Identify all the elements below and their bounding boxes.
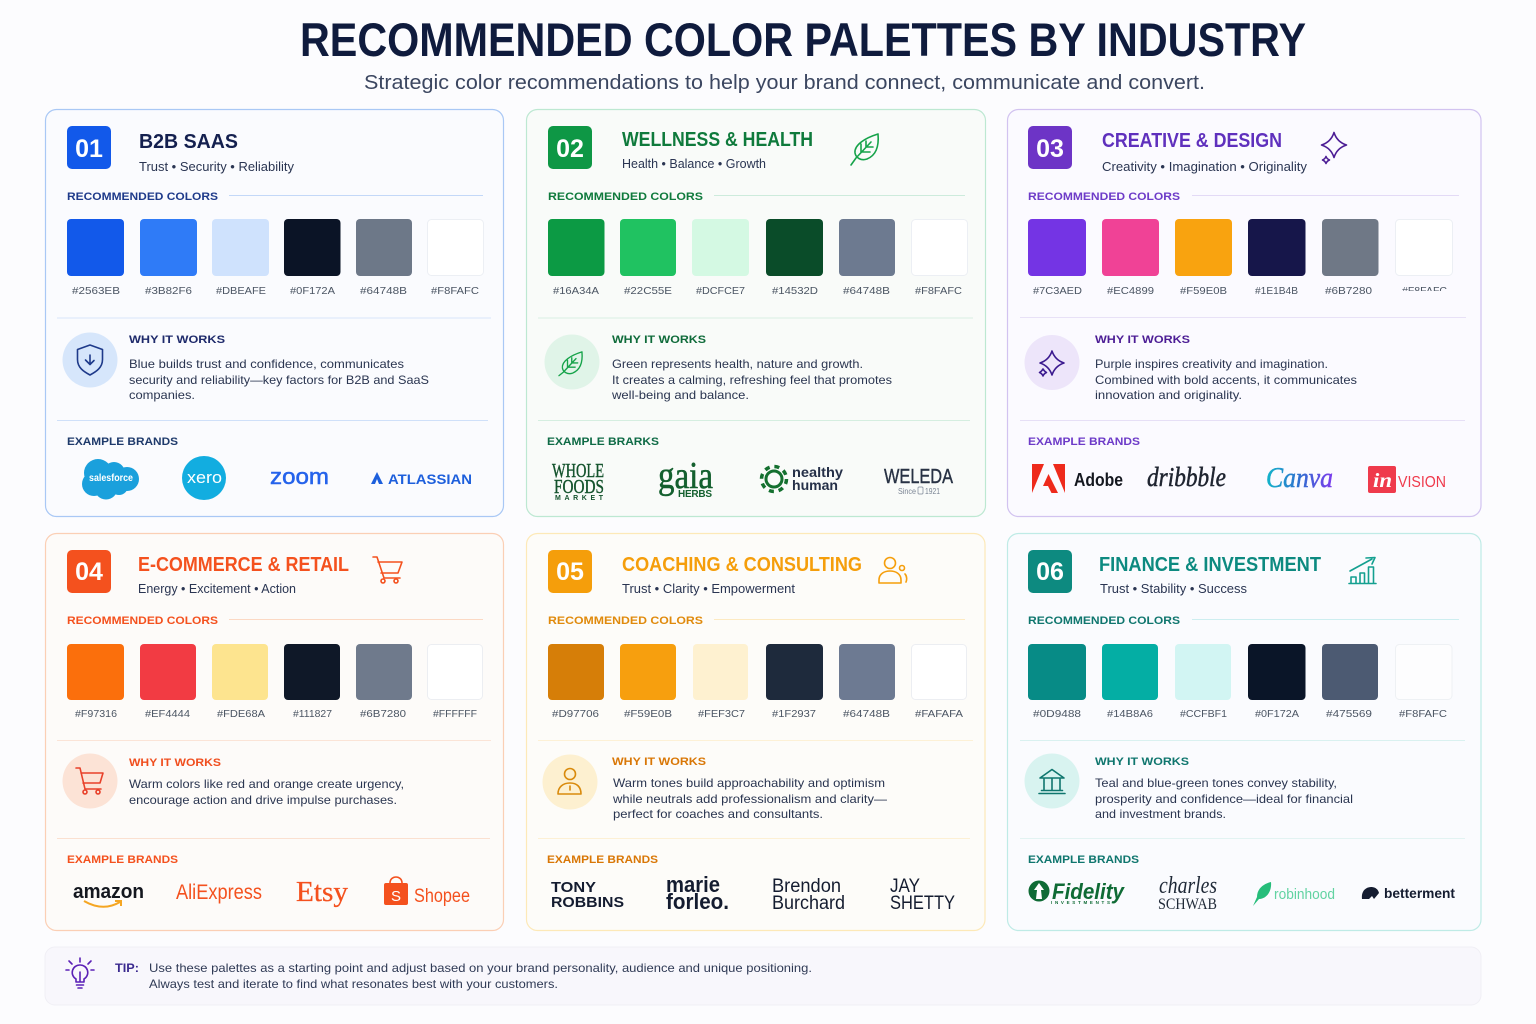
swatch #6B7280: #6B7280 [360, 708, 406, 720]
swatch #DBEAFE [212, 219, 269, 297]
subtitle: Strategic color recommendations to help your brand connect, communicate and convert. [364, 72, 1205, 94]
badge 01 [67, 126, 111, 169]
logo: tony robbins: ROBBINS [551, 894, 624, 911]
swatch #F97316: #F97316 [75, 708, 117, 720]
icon: leaf in circle [544, 334, 600, 390]
icon: sparkle in circle [1024, 335, 1080, 390]
swatch #0F172A [1248, 644, 1306, 720]
tip text: TIP: [115, 961, 139, 975]
logo: shopee: S [391, 888, 401, 905]
logo: healthy human: human [792, 477, 838, 493]
logo: aliexpress: AliExpress [176, 881, 262, 904]
icon: sparkle [1322, 132, 1346, 164]
logo: gaia herbs: HERBS [678, 489, 712, 500]
logo: etsy: Etsy [296, 877, 348, 908]
swatch #64748B [839, 644, 895, 720]
section label: example brands: EXAMPLE BRANDS [67, 854, 178, 866]
logo: whole foods [552, 460, 604, 502]
why it works: Teal and blue-green tones convey stability, [1095, 776, 1337, 790]
swatch #22C55E: #22C55E [624, 285, 672, 297]
swatch #FAFAFA [912, 644, 966, 720]
swatch #64748B [839, 219, 895, 297]
section label: recommended colors: RECOMMENDED COLORS [548, 615, 703, 627]
section label: recommended colors: RECOMMENDED COLORS [1028, 615, 1180, 627]
why it works: and investment brands. [1095, 807, 1226, 821]
logo: weleda: Since [898, 487, 916, 496]
swatch #EC4899: #EC4899 [1107, 285, 1154, 297]
logo: whole foods: MARKET [555, 495, 604, 502]
icon: person in circle [542, 754, 598, 810]
logo: xero [182, 456, 226, 500]
logo: charles schwab: charles [1159, 873, 1217, 899]
logo: shopee: Shopee [414, 886, 470, 907]
swatch #F8FAFC (clipped label) [1396, 220, 1452, 297]
why it works: WHY IT WORKS [612, 756, 706, 768]
swatch #16A34A: #16A34A [553, 285, 599, 297]
swatch #F8FAFC: #F8FAFC [915, 285, 962, 297]
swatch #14532D: #14532D [772, 285, 818, 297]
why it works: Warm colors like red and orange create urgency, [129, 777, 404, 791]
why it works [1095, 756, 1353, 821]
swatch #3B82F6 [140, 219, 197, 297]
section label: recommended colors: RECOMMENDED COLORS [1028, 191, 1180, 203]
swatch #64748B: #64748B [360, 285, 407, 297]
swatch #DBEAFE: #DBEAFE [216, 285, 266, 297]
why it works [611, 334, 892, 402]
swatch #F8FAFC [1396, 644, 1452, 720]
why it works: innovation and originality. [1095, 388, 1242, 402]
logo: adobe [1032, 464, 1123, 493]
why it works: well-being and balance. [611, 388, 749, 402]
badge 05: 05 [556, 558, 584, 586]
swatch #0D9488 [1028, 644, 1086, 720]
swatch #CCFBF1 [1175, 644, 1231, 720]
badge 05 [548, 550, 592, 593]
heading: WELLNESS & HEALTH [622, 129, 813, 151]
why it works: Green represents health, nature and growth. [612, 357, 863, 371]
badge 01: 01 [75, 135, 103, 163]
logo: brendon burchard [772, 876, 845, 914]
swatch #EF4444 [140, 644, 196, 720]
badge 03: 03 [1036, 135, 1064, 163]
swatch #FAFAFA: #FAFAFA [915, 708, 963, 720]
logo: jay shetty: SHETTY [890, 893, 955, 914]
why it works: while neutrals add professionalism and clarity— [612, 792, 887, 806]
swatch #22C55E [620, 219, 676, 297]
swatch #64748B: #64748B [843, 285, 890, 297]
swatch #7C3AED [1028, 219, 1086, 297]
swatch #F8FAFC [428, 220, 484, 297]
swatch #111827 [284, 644, 340, 720]
why it works: WHY IT WORKS [129, 334, 225, 346]
swatch #F59E0B [620, 644, 676, 720]
section label: example brarks: EXAMPLE BRARKS [547, 436, 659, 448]
logo: salesforce [82, 459, 139, 500]
swatch #CCFBF1: #CCFBF1 [1180, 708, 1227, 720]
logo: healthy human [762, 464, 843, 493]
icon: light bulb [66, 958, 94, 988]
logo: xero: xero [187, 468, 222, 487]
swatch #6B7280: #6B7280 [1325, 285, 1372, 297]
logo: robinhood: robinhood [1274, 886, 1335, 903]
why it works: security and reliability—key factors for B2B and SaaS [129, 373, 429, 387]
swatch #0F172A [284, 219, 340, 297]
title: RECOMMENDED COLOR PALETTES BY INDUSTRY [300, 13, 1306, 66]
logo: whole foods: FOODS [554, 476, 604, 498]
logo: zoom: zoom [270, 464, 329, 489]
tagline: Trust • Clarity • Empowerment [622, 582, 796, 596]
icon: bank in circle [1024, 754, 1080, 808]
swatch #0D9488: #0D9488 [1033, 708, 1081, 720]
swatch #16A34A [548, 219, 604, 297]
swatch #1E1B4B: #1E1B4B [1255, 285, 1298, 297]
swatch #0F172A: #0F172A [290, 285, 335, 297]
badge 02 [548, 126, 592, 169]
icon: shield [62, 332, 118, 388]
logo: salesforce: salesforce [89, 473, 133, 484]
heading: FINANCE & INVESTMENT [1099, 554, 1321, 576]
swatch #3B82F6: #3B82F6 [145, 285, 192, 297]
logo: tony robbins [551, 879, 624, 911]
logo: gaia herbs: gaia [658, 455, 713, 497]
swatch #F59E0B: #F59E0B [1180, 285, 1227, 297]
swatch #DCFCE7: #DCFCE7 [696, 285, 745, 297]
logo: shopee [384, 877, 470, 907]
swatch #14B8A6: #14B8A6 [1107, 708, 1153, 720]
why it works: prosperity and confidence—ideal for financial [1095, 792, 1353, 806]
tip text: Use these palettes as a starting point and adjust based on your brand personality, audience and unique positioning. [149, 961, 812, 975]
swatch #FEF3C7: #FEF3C7 [698, 708, 745, 720]
swatch #6B7280 [356, 644, 412, 720]
panel: Creative & Design [1008, 110, 1481, 516]
heading: B2B SAAS [139, 131, 238, 153]
section label: recommended colors: RECOMMENDED COLORS [548, 191, 703, 203]
logo: robinhood [1253, 882, 1335, 906]
badge 03 [1028, 126, 1072, 169]
swatch #64748B: #64748B [843, 708, 890, 720]
logo: tony robbins: TONY [551, 879, 596, 896]
tagline: Energy • Excitement • Action [138, 582, 296, 596]
swatch #FFFFFF [428, 644, 482, 720]
swatch #FEF3C7 [693, 644, 748, 720]
heading: COACHING & CONSULTING [622, 554, 862, 576]
panel: E-Commerce & Retail [46, 534, 504, 930]
swatch #2563EB [67, 219, 124, 297]
why it works: Purple inspires creativity and imagination. [1095, 357, 1328, 371]
why it works: Blue builds trust and confidence, communicates [129, 357, 404, 371]
badge 04: 04 [75, 558, 103, 586]
swatch #FFFFFF: #FFFFFF [433, 708, 477, 720]
tip bar [45, 947, 1481, 1005]
logo: charles schwab [1158, 873, 1217, 913]
heading: CREATIVE & DESIGN [1102, 130, 1282, 152]
swatch #F59E0B: #F59E0B [624, 708, 672, 720]
badge 06: 06 [1036, 558, 1064, 586]
badge 04 [67, 550, 111, 593]
logo: invision: VISION [1398, 474, 1446, 491]
logo: charles schwab: SCHWAB [1158, 896, 1217, 913]
logo: marie forleo [666, 872, 729, 914]
badge 06 [1028, 550, 1072, 593]
section label: recommended colors: RECOMMENDED COLORS [67, 615, 218, 627]
logo: jay shetty: JAY [890, 876, 920, 897]
logo: atlassian: ATLASSIAN [388, 471, 472, 487]
panel: B2B SaaS [46, 110, 504, 516]
logo: weleda: WELEDA [884, 466, 954, 488]
logo: whole foods: WHOLE [552, 460, 604, 482]
logo: marie forleo: forleo. [666, 889, 729, 914]
swatch #DCFCE7 [692, 219, 749, 297]
panel: Wellness & Health [526, 110, 986, 516]
logo: invision [1368, 466, 1446, 493]
logo: fidelity: Fidelity [1052, 879, 1126, 904]
section label: recommended colors: RECOMMENDED COLORS [67, 191, 218, 203]
swatch #FDE68A: #FDE68A [217, 708, 265, 720]
swatch #14B8A6 [1102, 644, 1158, 720]
section label: example brands: EXAMPLE BRANDS [1028, 436, 1140, 448]
swatch #1E1B4B [1248, 219, 1306, 297]
swatch #F8FAFC: #F8FAFC [431, 285, 479, 297]
why it works: WHY IT WORKS [1095, 756, 1189, 768]
logo: dribbble: dribbble [1147, 462, 1226, 492]
section label: example brands: EXAMPLE BRANDS [1028, 854, 1139, 866]
swatch #EC4899 [1102, 219, 1159, 297]
swatch #D97706 [548, 644, 604, 720]
logo: weleda [884, 466, 954, 496]
heading: E-COMMERCE & RETAIL [138, 554, 349, 576]
logo: invision: in [1373, 470, 1392, 492]
swatch #1F2937 [766, 644, 823, 720]
why it works: WHY IT WORKS [129, 757, 221, 769]
logo: marie forleo: marie [666, 872, 720, 897]
section label: example brands: EXAMPLE BRANDS [67, 436, 178, 448]
why it works: WHY IT WORKS [612, 334, 706, 346]
swatch #F97316 [67, 644, 124, 720]
section label: example brands: EXAMPLE BRANDS [547, 854, 658, 866]
icon: cart in circle [62, 754, 118, 808]
logo: amazon: amazon [73, 881, 144, 903]
tip text: Always test and iterate to find what resonates best with your customers. [149, 977, 558, 991]
panel: Coaching & Consulting [526, 534, 985, 930]
swatch #F8FAFC [912, 220, 968, 297]
why it works: encourage action and drive impulse purchases. [129, 793, 397, 807]
logo: fidelity: INVESTMENTS [1051, 900, 1110, 905]
tagline: Health • Balance • Growth [622, 157, 766, 171]
swatch #1F2937: #1F2937 [772, 708, 816, 720]
swatch #F8FAFC (clipped label): #F8FAFC [1402, 285, 1447, 297]
logo: brendon burchard: Brendon [772, 876, 841, 897]
why it works: Combined with bold accents, it communicates [1095, 373, 1357, 387]
why it works [612, 756, 887, 821]
swatch #F59E0B [1175, 219, 1232, 297]
icon: growth chart [1349, 558, 1376, 584]
swatch #F8FAFC: #F8FAFC [1399, 708, 1447, 720]
swatch #475569 [1322, 644, 1378, 720]
swatch #2563EB: #2563EB [72, 285, 120, 297]
swatch #475569: #475569 [1326, 708, 1372, 720]
swatch #64748B [356, 219, 412, 297]
swatch #6B7280 [1322, 219, 1378, 297]
why it works: perfect for coaches and consultants. [613, 807, 823, 821]
logo: healthy human: nealthy [792, 464, 843, 480]
swatch #14532D [766, 219, 823, 297]
swatch #0F172A: #0F172A [1255, 708, 1299, 720]
why it works [129, 757, 404, 807]
tagline: Creativity • Imagination • Originality [1102, 160, 1308, 174]
why it works [1095, 334, 1357, 402]
logo: betterment: betterment [1384, 885, 1455, 901]
swatch #D97706: #D97706 [552, 708, 599, 720]
why it works [129, 334, 429, 402]
icon: cart [373, 557, 402, 583]
swatch #111827: #111827 [293, 708, 332, 720]
icon: leaf [851, 134, 878, 165]
panel: Finance & Investment [1008, 534, 1481, 930]
swatch #FDE68A [212, 644, 268, 720]
swatch #EF4444: #EF4444 [145, 708, 190, 720]
why it works: Warm tones build approachability and optimism [613, 776, 885, 790]
tagline: Trust • Security • Reliability [139, 160, 295, 174]
badge 02: 02 [556, 135, 584, 163]
icon: people [879, 558, 907, 583]
swatch #7C3AED: #7C3AED [1033, 285, 1082, 297]
tagline: Trust • Stability • Success [1100, 582, 1247, 596]
logo: weleda: 1921 [925, 487, 940, 496]
logo: canva: Canva [1266, 463, 1333, 494]
why it works: WHY IT WORKS [1095, 334, 1190, 346]
why it works: It creates a calming, refreshing feel that promotes [612, 373, 892, 387]
tip text [115, 961, 812, 991]
why it works: companies. [129, 388, 195, 402]
logo: adobe: Adobe [1074, 470, 1123, 490]
logo: brendon burchard: Burchard [772, 893, 845, 914]
logo: jay shetty [890, 876, 955, 914]
